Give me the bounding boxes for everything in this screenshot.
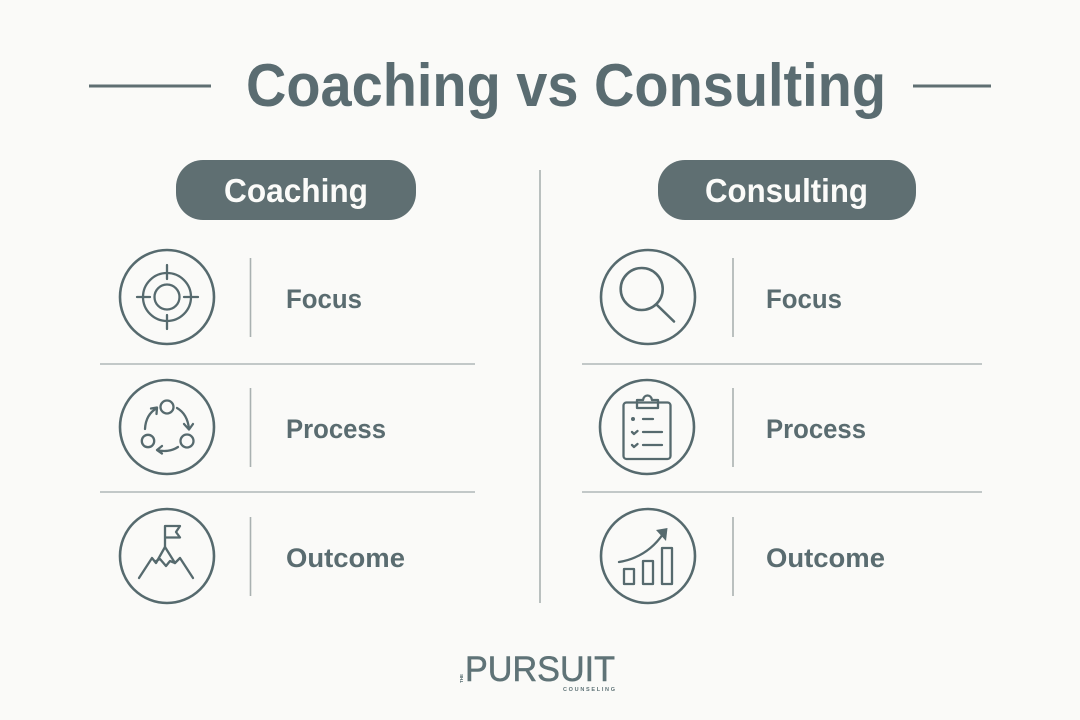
row: consulting process	[600, 380, 866, 474]
label: process: Process	[766, 414, 866, 444]
row: coaching outcome	[120, 509, 405, 603]
panel: coaching	[100, 160, 475, 603]
icon: cycle	[120, 380, 214, 474]
heading: coaching pill: Coaching	[224, 172, 368, 209]
icon: growth chart	[601, 509, 695, 603]
label: focus: Focus	[286, 284, 362, 314]
row: consulting outcome	[601, 509, 885, 603]
row: coaching focus	[120, 250, 362, 344]
icon: mountain flag	[120, 509, 214, 603]
heading: consulting pill: Consulting	[705, 172, 868, 209]
icon: target	[120, 250, 214, 344]
label: focus: Focus	[766, 284, 842, 314]
row: coaching process	[120, 380, 386, 474]
logo: the pursuit counseling: COUNSELING	[563, 687, 615, 693]
heading: consulting pill	[658, 160, 916, 220]
label: process: Process	[286, 414, 386, 444]
panel: consulting	[582, 160, 982, 603]
logo: the pursuit counseling: PURSUIT	[465, 650, 615, 689]
icon: clipboard	[600, 380, 694, 474]
heading: coaching pill	[176, 160, 416, 220]
title: Coaching vs Consulting	[246, 52, 886, 119]
logo: the pursuit counseling: THE	[459, 674, 464, 683]
label: outcome: Outcome	[766, 543, 885, 573]
label: outcome: Outcome	[286, 543, 405, 573]
row: consulting focus	[601, 250, 842, 344]
icon: magnifier	[601, 250, 695, 344]
